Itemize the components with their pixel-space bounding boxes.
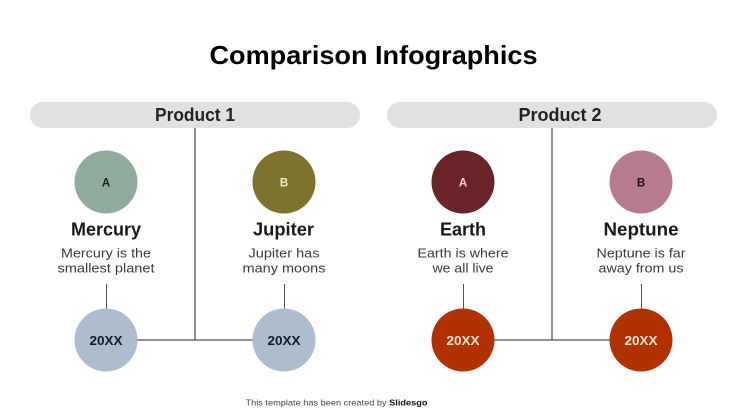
panel: product 1 bbox=[30, 102, 360, 372]
heading: product 1 bbox=[30, 102, 360, 128]
icon: circle A: A bbox=[102, 178, 110, 190]
icon: circle A bbox=[432, 150, 494, 214]
date circle: 20XX bbox=[90, 333, 123, 348]
heading: product 2: Product 2 bbox=[518, 105, 602, 125]
date circle bbox=[74, 308, 138, 372]
text: Neptune description: Neptune is far bbox=[596, 246, 686, 260]
date circle: 20XX bbox=[446, 333, 480, 348]
icon: circle B bbox=[610, 150, 672, 214]
item: Mercury bbox=[58, 150, 155, 372]
heading: product 1: Product 1 bbox=[155, 105, 235, 125]
item: Neptune bbox=[596, 150, 686, 372]
text: Jupiter description: Jupiter has bbox=[248, 246, 320, 260]
text: Neptune description: away from us bbox=[598, 260, 684, 276]
item: Jupiter bbox=[242, 150, 326, 372]
date circle bbox=[432, 308, 494, 372]
heading: Jupiter: Jupiter bbox=[253, 220, 314, 240]
icon: circle A bbox=[74, 150, 138, 214]
date circle bbox=[610, 308, 672, 372]
item: Earth bbox=[418, 150, 508, 372]
date circle: 20XX bbox=[624, 333, 658, 348]
title: Comparison Infographics bbox=[210, 40, 538, 70]
heading: Neptune: Neptune bbox=[604, 220, 678, 240]
text: Earth description: we all live bbox=[431, 260, 494, 276]
date circle: 20XX bbox=[268, 333, 301, 348]
heading: Mercury: Mercury bbox=[71, 220, 141, 240]
text: Earth description: Earth is where bbox=[418, 246, 508, 260]
footer credit: This template has been created by Slidesgo bbox=[246, 398, 428, 408]
heading: product 2 bbox=[387, 102, 717, 128]
icon: circle B bbox=[252, 150, 316, 214]
panel: product 2 bbox=[387, 102, 717, 372]
connector lines product 1 bbox=[106, 128, 284, 340]
text: Mercury description: Mercury is the bbox=[61, 246, 151, 260]
connector lines product 2 bbox=[464, 128, 642, 340]
icon: circle B: B bbox=[637, 178, 645, 190]
icon: circle B: B bbox=[280, 178, 288, 190]
date circle bbox=[252, 308, 316, 372]
icon: circle A: A bbox=[459, 178, 467, 190]
text: Jupiter description: many moons bbox=[242, 260, 326, 276]
heading: Earth: Earth bbox=[440, 220, 486, 240]
text: Mercury description: smallest planet bbox=[58, 260, 155, 276]
